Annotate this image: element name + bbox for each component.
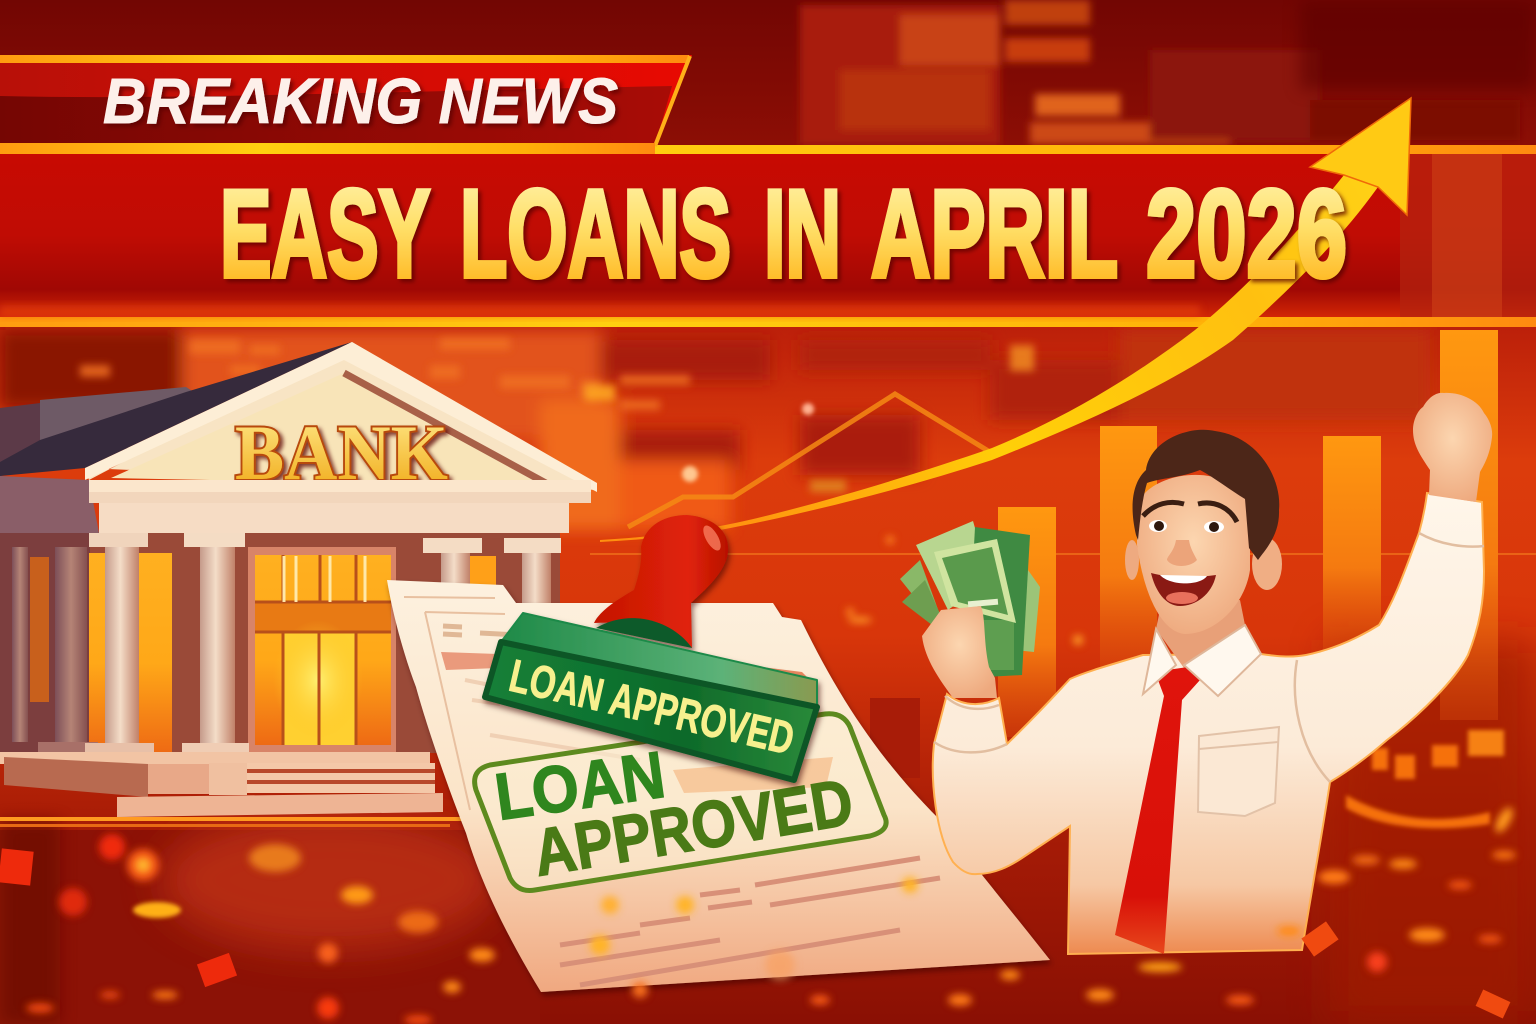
eyes — [1149, 520, 1224, 533]
faint trend line — [628, 394, 990, 527]
ears — [1125, 538, 1282, 590]
blurred city middle — [0, 330, 1430, 530]
headline text: LOANS — [460, 166, 731, 304]
document form lines — [404, 597, 940, 985]
steps — [0, 752, 560, 827]
dark floor glow — [0, 830, 540, 1024]
stamped text: LOAN — [491, 737, 669, 834]
fist — [1413, 393, 1492, 502]
pediment — [85, 342, 597, 490]
approved outline stamp — [475, 714, 886, 890]
hair — [1133, 430, 1279, 560]
smudged orange print — [673, 757, 833, 793]
man — [900, 393, 1492, 954]
roof — [0, 342, 352, 476]
mouth — [1151, 573, 1216, 606]
breaking news text: BREAKING NEWS — [103, 65, 618, 137]
neck — [1156, 600, 1245, 668]
headline text: IN — [764, 166, 841, 304]
shirt pocket — [1198, 727, 1279, 816]
confetti — [0, 536, 1516, 1024]
growth arrow — [600, 98, 1411, 542]
door — [248, 547, 396, 752]
shirt body and arms — [933, 493, 1484, 954]
approved outline stamp: APPROVED — [528, 764, 858, 890]
bar chart — [998, 330, 1498, 737]
collar — [1143, 625, 1261, 696]
dark right lower — [1330, 640, 1536, 1024]
blurred skyline top — [800, 0, 1520, 145]
headline text: 2026 — [1146, 166, 1347, 304]
bank sign: BANK — [235, 409, 448, 496]
eyebrows — [1143, 502, 1237, 522]
facade wall — [0, 533, 560, 753]
breaking news banner — [0, 55, 692, 154]
stamp block — [485, 613, 817, 780]
loan document — [387, 580, 1050, 992]
stamp label: LOAN APPROVED — [505, 649, 799, 764]
columns — [12, 533, 561, 757]
entablature — [89, 480, 591, 533]
headline text: APRIL — [871, 166, 1118, 304]
headline text — [220, 166, 1347, 304]
headline band — [0, 145, 1536, 327]
nose — [1167, 540, 1197, 566]
tie — [1115, 667, 1200, 954]
face — [1137, 475, 1250, 634]
hand holding cash — [922, 606, 997, 698]
approval stamp — [485, 515, 817, 780]
shirt folds — [934, 533, 1484, 782]
headline text: EASY — [220, 166, 430, 304]
red paper bits — [0, 848, 1510, 1018]
windows — [30, 557, 49, 702]
cash — [900, 521, 1040, 678]
left side facade — [0, 476, 99, 533]
bank building — [0, 342, 597, 827]
glowing orbs — [26, 536, 1516, 1024]
stamp handle — [594, 515, 728, 648]
